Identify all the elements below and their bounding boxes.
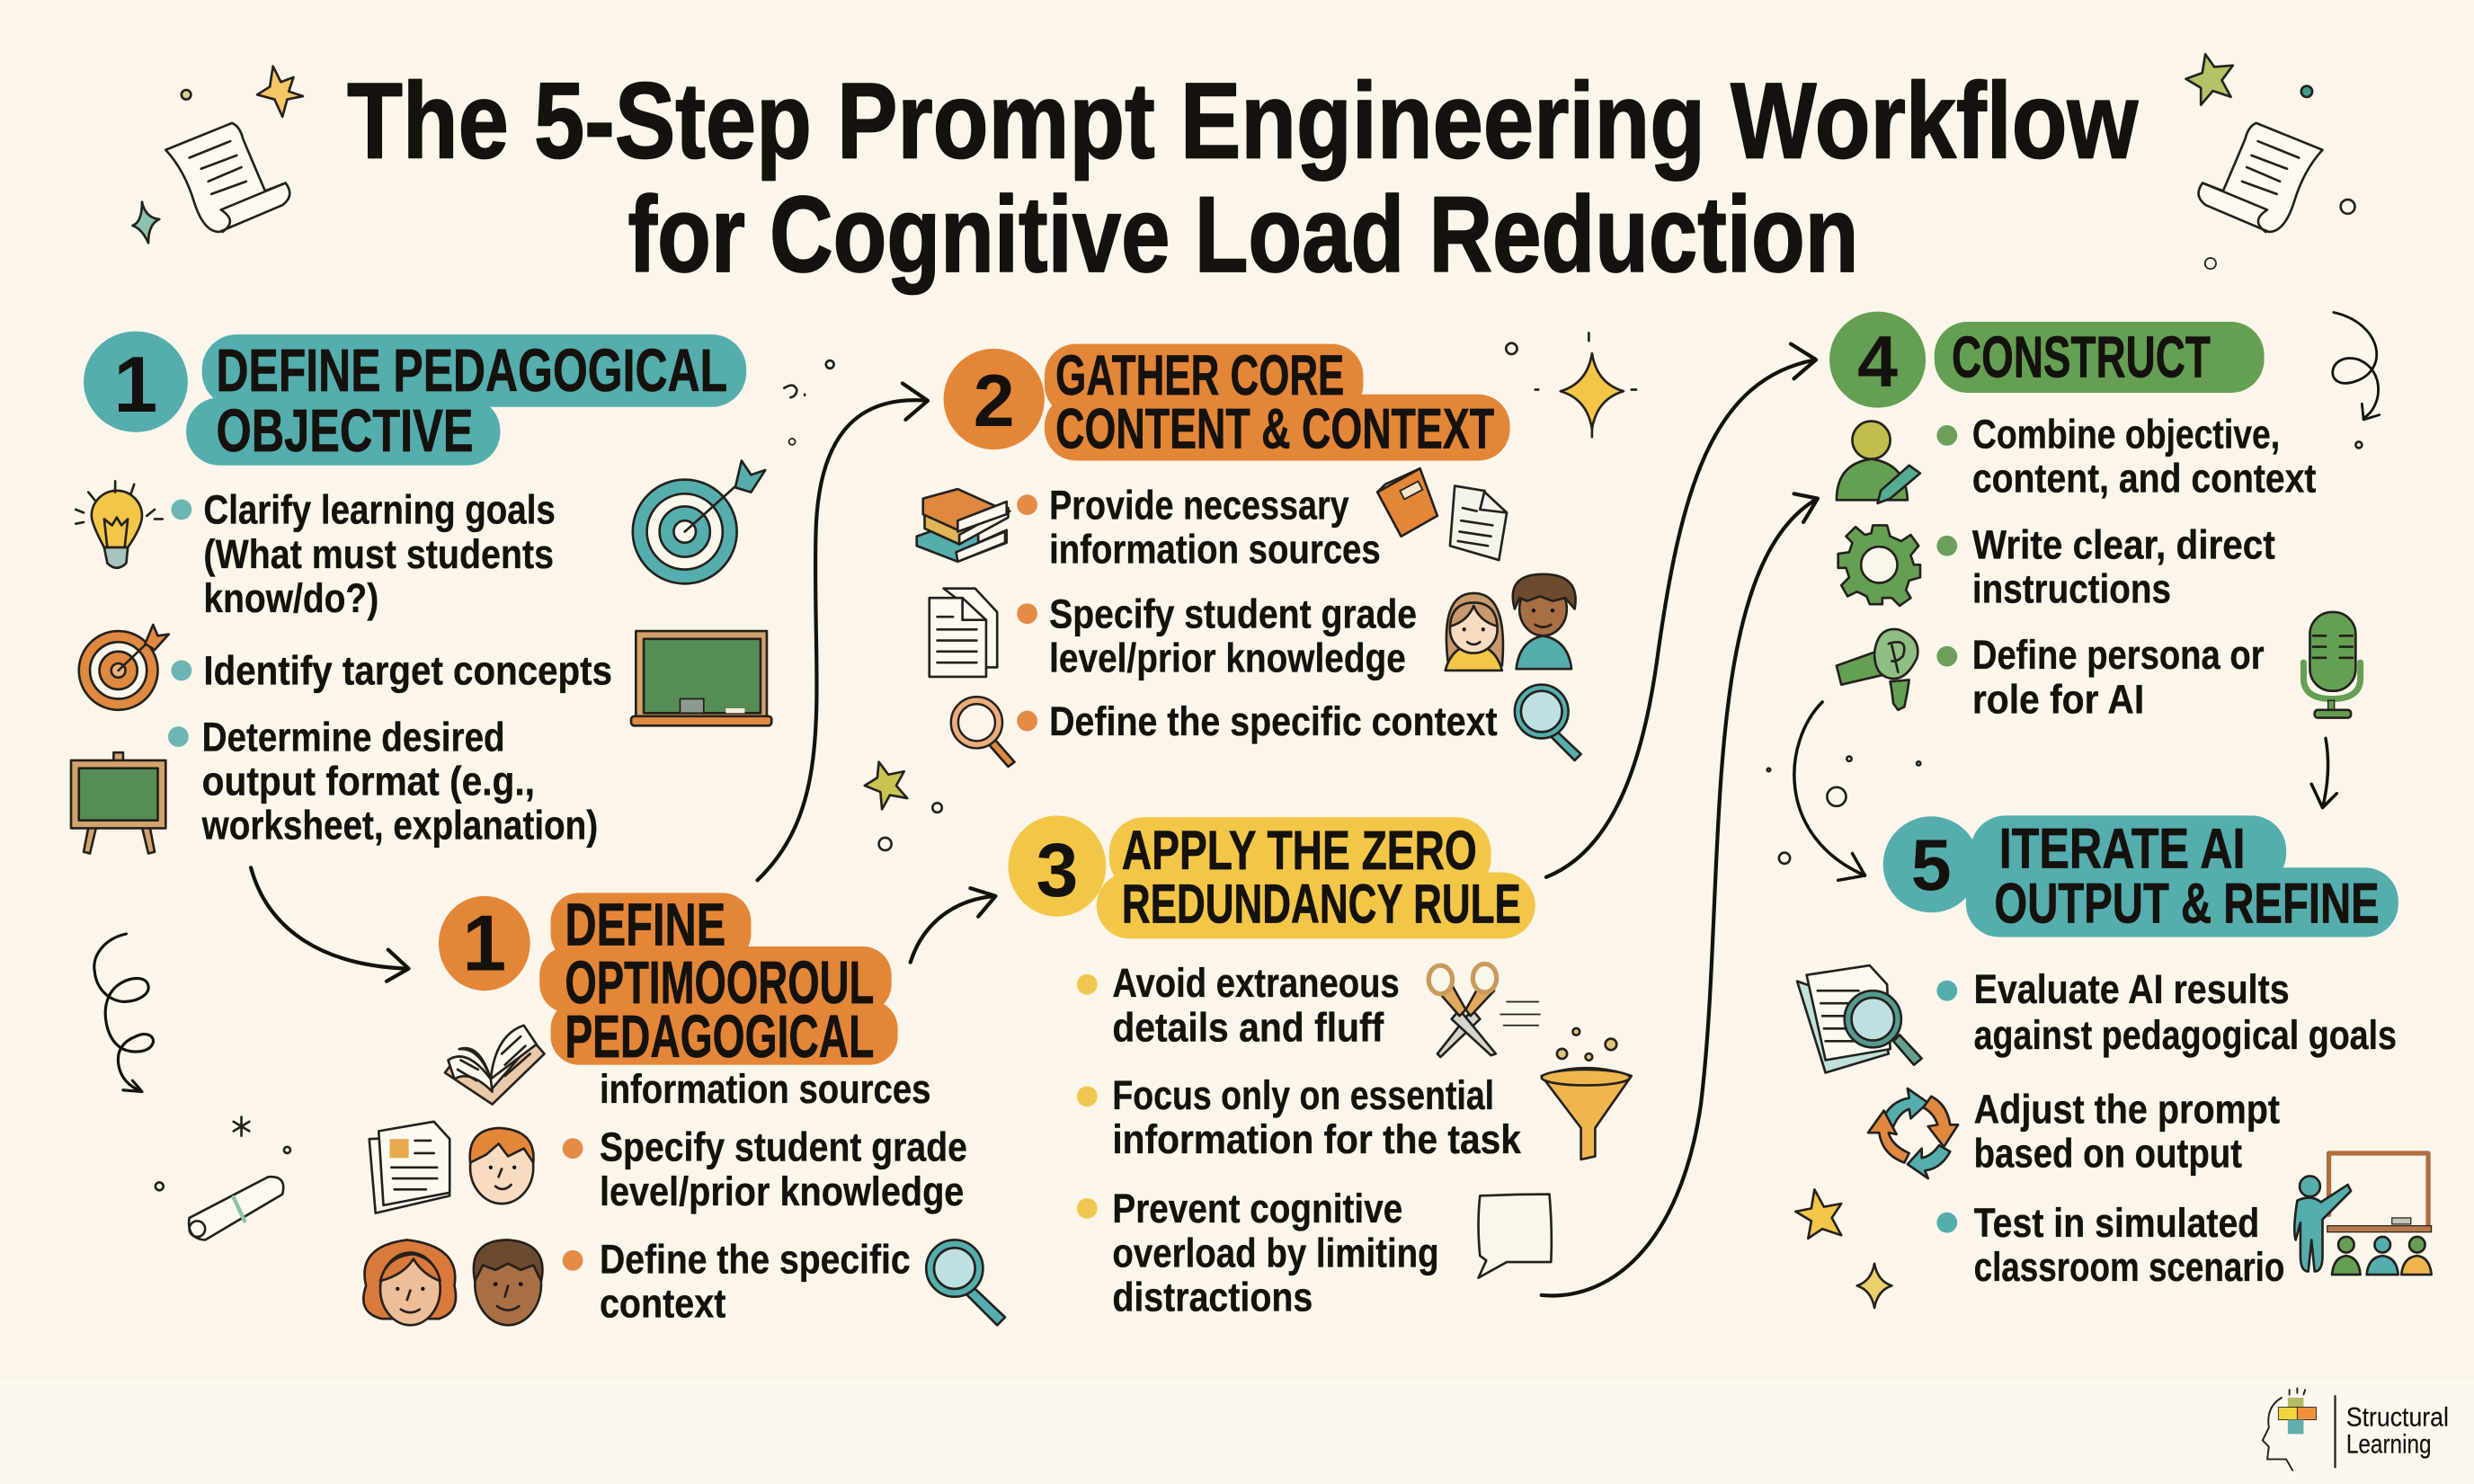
panel: step 2 gather core content and context — [917, 344, 1581, 767]
panel: step 3 apply the zero redundancy rule — [1009, 815, 1632, 1320]
icon: teacher and students — [2294, 1153, 2432, 1275]
step 4 heading: 4 — [1857, 322, 1898, 403]
step 5 heading: ITERATE AI — [1999, 817, 2245, 880]
title — [347, 62, 2139, 295]
icon: white document — [1450, 486, 1507, 560]
icon: person with pencil — [1837, 422, 1920, 503]
arrow: step 1 to step 2 — [757, 383, 928, 880]
bullet: write clear instructions: Write clear, direct — [1972, 521, 2275, 567]
decoration: top left scroll and stars — [132, 67, 303, 243]
icon: light bulb — [76, 481, 163, 568]
decoration: top right scroll and stars — [2186, 54, 2354, 269]
decoration: mid sparkle and small marks — [784, 333, 2362, 864]
bullet: test in simulated classroom: Test in simulated — [1974, 1200, 2259, 1246]
step 5 heading — [1883, 815, 2398, 937]
bullet: determine desired output format: output format (e.g., — [202, 759, 535, 804]
orange step heading: OPTIMOOROUL — [565, 950, 874, 1017]
decoration: diploma and marks — [156, 1117, 290, 1240]
icon: gear — [1838, 525, 1920, 606]
bullet: clarify learning goals: Clarify learning goals — [203, 487, 556, 533]
icon: orange magnifier — [955, 700, 1015, 767]
bullet: clarify learning goals: know/do?) — [203, 575, 378, 621]
icon: girl with yellow shirt — [1446, 593, 1503, 671]
step 2 heading: 2 — [974, 360, 1015, 442]
bullet: provide necessary information sources: Provide necessary — [1049, 482, 1349, 528]
panel: step 1 define pedagogical objective — [71, 332, 771, 853]
icon: document under magnifier — [1797, 965, 1922, 1072]
bullet: focus only on essential — [1077, 1072, 1521, 1162]
bullet: test in simulated classroom — [1936, 1200, 2284, 1290]
bullet: avoid extraneous details: Avoid extraneous — [1112, 960, 1400, 1006]
panel: step 1 duplicate orange define optimooroul pedagogical — [363, 892, 1005, 1326]
bullet: adjust the prompt: based on output — [1974, 1131, 2242, 1177]
bullet: specify student grade level: Specify student grade — [1049, 591, 1417, 637]
step 1 heading: OBJECTIVE — [216, 398, 474, 465]
bullet: prevent cognitive overload — [1077, 1186, 1439, 1320]
bullet: adjust the prompt: Adjust the prompt — [1974, 1087, 2280, 1133]
bullet: provide necessary information sources: information sources — [1049, 527, 1381, 573]
orange step heading: DEFINE — [565, 892, 725, 958]
bullet: evaluate ai results: Evaluate AI results — [1974, 966, 2290, 1012]
logo: structural learning — [2263, 1388, 2449, 1471]
icon: stacked pages — [930, 589, 997, 677]
logo: structural learning: Structural — [2346, 1403, 2449, 1433]
icon: speech bubble — [1479, 1195, 1552, 1278]
bullet: define the specific context: context — [600, 1280, 725, 1326]
step 3 heading — [1009, 815, 1535, 938]
bullet: avoid extraneous details — [1077, 960, 1400, 1050]
bullet: write clear instructions — [1936, 521, 2275, 611]
panel: step 5 iterate ai output and refine — [1797, 815, 2432, 1290]
icon: microphone — [2303, 612, 2361, 718]
bullet: clarify learning goals: (What must students — [203, 531, 554, 577]
bullet: specify student grade: level/prior knowledge — [600, 1169, 964, 1214]
bullet: determine desired output format: worksheet, explanation) — [201, 803, 598, 849]
bullet: define persona: Define persona or — [1972, 632, 2265, 678]
arrow: step 1 to orange step — [251, 867, 409, 982]
bullet: clarify learning goals — [171, 487, 556, 621]
step 4 heading: CONSTRUCT — [1952, 324, 2211, 389]
arrow: short down to step 5 — [2311, 738, 2336, 808]
icon: curly-haired girl face — [363, 1240, 456, 1325]
bullet: determine desired output format: Determine desired — [202, 714, 505, 760]
bullet: specify student grade: Specify student grade — [600, 1124, 967, 1170]
icon: stack of books — [917, 489, 1010, 562]
step 4 heading — [1829, 312, 2265, 408]
bullet: prevent cognitive overload: overload by limiting — [1112, 1230, 1439, 1275]
bullet: evaluate ai results — [1936, 966, 2397, 1058]
step 3 heading: 3 — [1036, 828, 1078, 912]
icon: persona role tool — [1837, 629, 1918, 710]
title: for Cognitive Load Reduction — [628, 175, 1858, 295]
bullet: focus only on essential: Focus only on essential — [1112, 1072, 1494, 1118]
bullet: combine objective: content, and context — [1972, 456, 2316, 502]
bullet: provide necessary information sources — [1017, 482, 1381, 573]
decoration: lower right star and sparkle — [1795, 1189, 1891, 1308]
step 1 heading: 1 — [114, 341, 157, 429]
panel: step 4 construct — [1829, 312, 2361, 722]
logo: structural learning: Learning — [2346, 1429, 2432, 1459]
step 2 heading: CONTENT & CONTEXT — [1055, 397, 1494, 460]
bullet: avoid extraneous details: details and fluff — [1112, 1004, 1384, 1050]
step 3 heading: APPLY THE ZERO — [1122, 820, 1477, 882]
bullet: identify target concepts: Identify target concepts — [203, 648, 612, 694]
icon: red-haired boy face — [470, 1128, 534, 1204]
arrow: step 3 bottom to step 4 — [1542, 493, 1818, 1295]
orange step heading: PEDAGOGICAL — [565, 1004, 874, 1071]
bullet: prevent cognitive overload: Prevent cognitive — [1112, 1186, 1402, 1231]
step 1 heading: DEFINE PEDAGOGICAL — [216, 338, 727, 404]
arrow: step 4 to step 5 curve — [1794, 702, 1865, 880]
icon: cycle arrows — [1868, 1089, 1958, 1178]
bullet: focus only on essential: information for the task — [1112, 1116, 1521, 1162]
bullet: write clear instructions: instructions — [1972, 565, 2171, 611]
arrow: left squiggle — [94, 934, 153, 1092]
icon: scissors with lines — [1428, 964, 1540, 1057]
step 2 heading: GATHER CORE — [1055, 344, 1344, 407]
orange step heading: 1 — [462, 899, 506, 987]
bullet: define the specific context — [563, 1236, 911, 1326]
icon: teal target with arrow — [633, 460, 765, 583]
bullet: define persona — [1936, 632, 2265, 722]
bullet: adjust the prompt — [1974, 1087, 2280, 1177]
arrow: step 3 to step 4 — [1546, 344, 1816, 877]
bullet: test in simulated classroom: classroom scenario — [1974, 1244, 2284, 1290]
step 5 heading: 5 — [1911, 825, 1952, 906]
bullet: specify student grade level — [1017, 591, 1417, 681]
title: The 5-Step Prompt Engineering Workflow — [347, 62, 2139, 182]
bullet: prevent cognitive overload: distractions — [1112, 1274, 1313, 1320]
orange step heading — [439, 892, 898, 1071]
bullet: evaluate ai results: against pedagogical goals — [1974, 1012, 2397, 1058]
bullet: specify student grade level: level/prior knowledge — [1049, 635, 1406, 681]
step 1 heading — [84, 332, 746, 466]
bullet: define persona: role for AI — [1972, 676, 2144, 722]
bullet: define the specific context: Define the specific — [600, 1236, 911, 1282]
arrow: top right squiggle — [2333, 313, 2380, 420]
icon: chalkboard — [631, 631, 771, 725]
icon: easel board — [71, 752, 165, 853]
icon: funnel with drops — [1542, 1028, 1632, 1160]
bullet: combine objective: Combine objective, — [1972, 411, 2280, 457]
text: information sources: information sources — [600, 1066, 931, 1112]
bullet: combine objective — [1936, 411, 2316, 502]
icon: orange target with arrow — [79, 625, 169, 710]
icon: document with orange image — [369, 1122, 449, 1213]
arrow: orange step to step 3 — [911, 888, 995, 963]
bullet: determine desired output format — [168, 714, 598, 849]
icon: teal magnifying glass — [926, 1240, 1005, 1325]
step 2 heading — [944, 344, 1510, 460]
bullet: define the specific context: Define the specific context — [1049, 698, 1498, 744]
bullet: specify student grade — [563, 1124, 967, 1214]
icon: teal magnifier — [1515, 685, 1581, 760]
icon: orange book — [1377, 468, 1437, 537]
step 3 heading: REDUNDANCY RULE — [1122, 874, 1521, 936]
icon: open book — [445, 1026, 545, 1105]
icon: boy with teal shirt — [1513, 574, 1576, 669]
icon: dark-haired boy face — [474, 1240, 542, 1325]
